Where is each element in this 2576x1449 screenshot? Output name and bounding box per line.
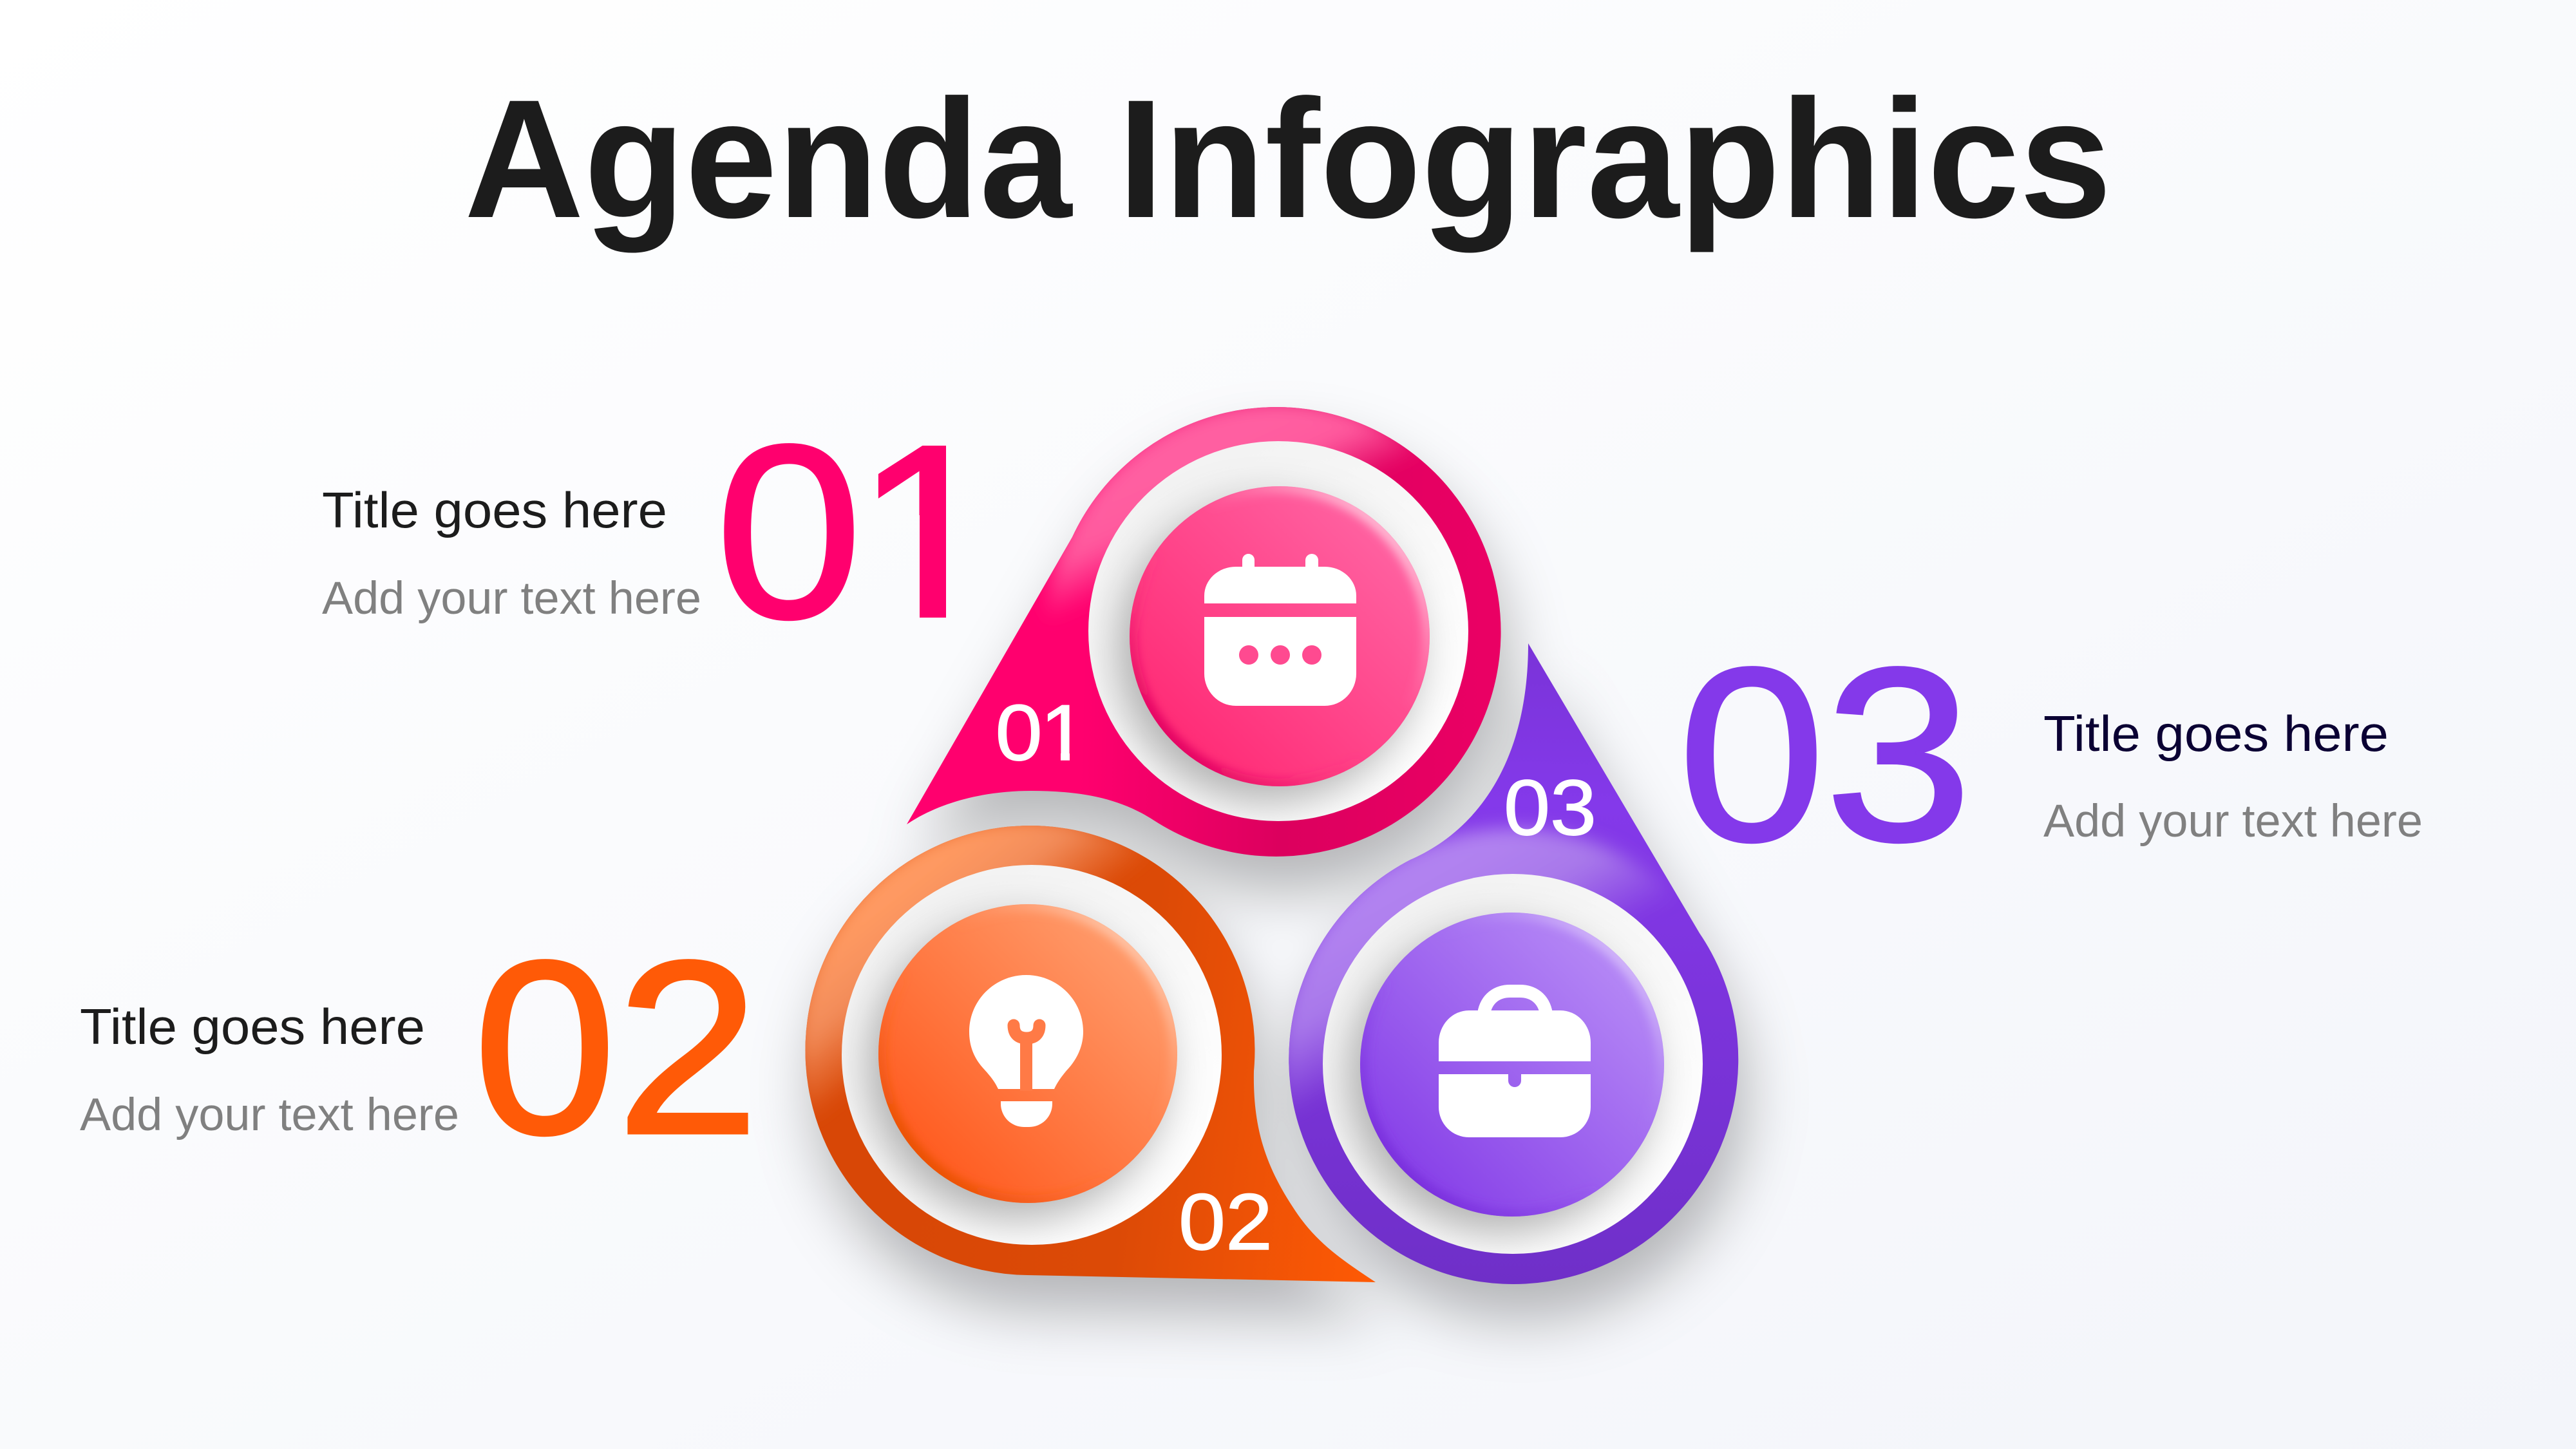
- orange disc: [878, 904, 1177, 1203]
- purple band: [1289, 643, 1738, 1284]
- small number 03: 03: [1504, 764, 1596, 851]
- label block 01: [322, 482, 701, 624]
- pink band: [907, 407, 1501, 857]
- title: Agenda Infographics: [464, 64, 2112, 254]
- small number 01: 01: [996, 688, 1087, 777]
- white ring: [1088, 441, 1468, 821]
- big number 03: 03: [1678, 617, 1972, 893]
- icon: briefcase: [1439, 991, 1591, 1137]
- white ring: [842, 865, 1222, 1245]
- title text: Title goes here: [80, 998, 425, 1055]
- title text: Title goes here: [2043, 705, 2389, 762]
- pink disc: [1130, 486, 1430, 786]
- orange band: [805, 826, 1376, 1282]
- body text: Add your text here: [80, 1090, 459, 1141]
- body text: Add your text here: [322, 573, 701, 624]
- purple disc: [1360, 913, 1664, 1217]
- label block 03: [2043, 705, 2423, 847]
- big number 02: 02: [473, 910, 759, 1186]
- icon: calendar: [1204, 554, 1356, 706]
- panel: item 01 drop: [907, 400, 1509, 864]
- white ring: [1323, 874, 1703, 1254]
- body text: Add your text here: [2043, 796, 2423, 847]
- big number 01: 01: [715, 394, 1001, 670]
- panel: item 02 drop: [797, 818, 1376, 1282]
- panel: item 03 drop: [1281, 643, 1745, 1292]
- icon: light bulb: [969, 975, 1083, 1127]
- drop shadows behind the three shapes: [813, 443, 1746, 1320]
- label block 02: [80, 998, 459, 1141]
- title text: Title goes here: [322, 482, 667, 538]
- small number 02: 02: [1179, 1178, 1273, 1267]
